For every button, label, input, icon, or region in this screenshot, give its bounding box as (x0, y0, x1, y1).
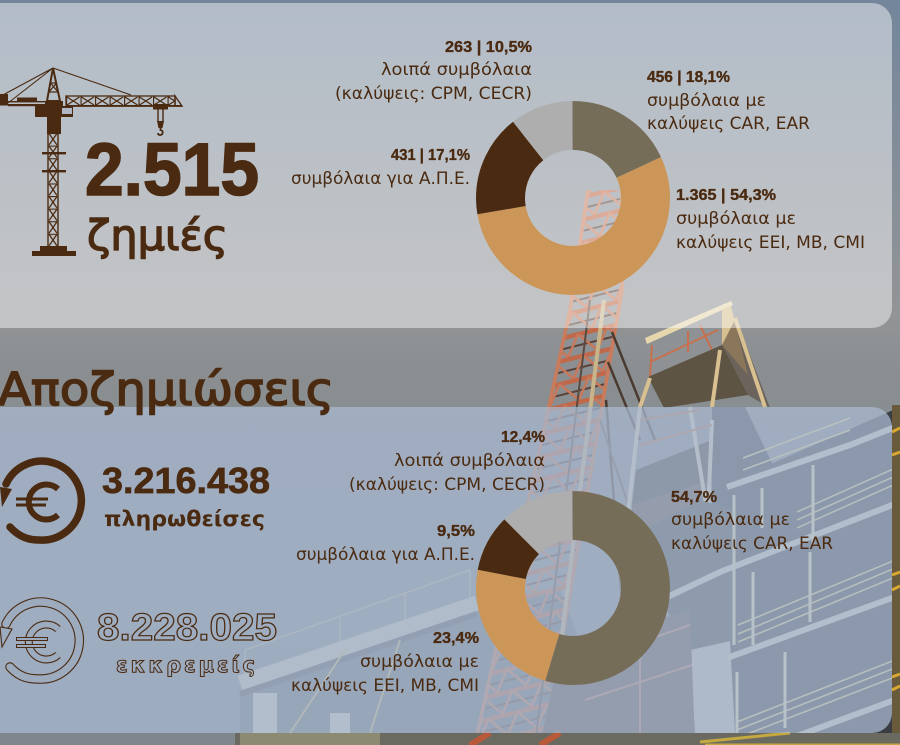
platform on the tower (625, 301, 790, 560)
building on the right (540, 405, 900, 745)
label: CAR, EAR compensation: συμβόλαια με (671, 510, 790, 529)
label: other contracts, claims (335, 39, 532, 103)
label: A.P.E. compensation (296, 523, 475, 564)
label: other contracts, compensation (349, 429, 545, 494)
icon: pending euro (0, 602, 79, 679)
label: other contracts, compensation: (καλύψεις: CPM, CECR) (349, 475, 545, 494)
heading: compensations: Αποζημιώσεις (0, 363, 334, 416)
label: EEI, MB, CMI compensation: συμβόλαια με (360, 652, 479, 671)
label: EEI, MB, CMI compensation (291, 630, 479, 695)
label: other contracts, compensation: λοιπά συμβόλαια (394, 451, 545, 470)
label: other contracts, claims: λοιπά συμβόλαια (381, 60, 532, 79)
label: CAR, EAR compensation: καλύψεις CAR, EAR (671, 534, 833, 553)
label: CAR, EAR compensation (671, 489, 833, 553)
label: other contracts, claims: 263 | 10,5% (445, 39, 532, 56)
claims caption: ζημιές (87, 211, 228, 260)
donut chart: compensation by cover type (500, 516, 646, 660)
label: A.P.E. claims: συμβόλαια για Α.Π.Ε. (291, 169, 470, 188)
pending amount: 8.228.025 (97, 607, 277, 649)
panel: claims (0, 3, 892, 328)
label: CAR, EAR claims (647, 69, 810, 133)
label: other contracts, compensation: 12,4% (501, 429, 545, 446)
label: CAR, EAR claims: συμβόλαια με (647, 91, 766, 110)
label: EEI, MB, CMI claims: 1.365 | 54,3% (676, 187, 776, 204)
icon: paid euro (0, 461, 81, 540)
label: EEI, MB, CMI compensation: 23,4% (433, 630, 479, 647)
crane mast in background (475, 190, 655, 745)
pending caption: εκκρεμείς (116, 653, 255, 677)
label: CAR, EAR compensation: 54,7% (671, 489, 717, 506)
label: A.P.E. compensation: 9,5% (437, 523, 475, 540)
donut chart: claims by cover type (500, 126, 646, 270)
bottom strip of the photo (0, 733, 900, 745)
label: CAR, EAR claims: 456 | 18,1% (647, 69, 730, 86)
claims total: 2.515 (85, 128, 259, 211)
label: A.P.E. claims (291, 147, 470, 188)
label: A.P.E. compensation: συμβόλαια για Α.Π.Ε. (296, 545, 475, 564)
icon: tower crane (0, 68, 182, 256)
label: A.P.E. claims: 431 | 17,1% (391, 147, 470, 164)
label: EEI, MB, CMI claims (676, 187, 865, 252)
panel: compensations (0, 407, 892, 733)
label: CAR, EAR claims: καλύψεις CAR, EAR (647, 114, 810, 133)
label: EEI, MB, CMI claims: καλύψεις EEI, MB, CMI (676, 233, 865, 252)
label: EEI, MB, CMI claims: συμβόλαια με (676, 209, 796, 228)
label: EEI, MB, CMI compensation: καλύψεις EEI, MB, CMI (291, 676, 479, 695)
paid caption: πληρωθείσες (104, 507, 265, 531)
paid amount: 3.216.438 (102, 460, 270, 501)
building on the left (240, 570, 620, 745)
label: other contracts, claims: (καλύψεις: CPM, CECR) (335, 84, 532, 103)
